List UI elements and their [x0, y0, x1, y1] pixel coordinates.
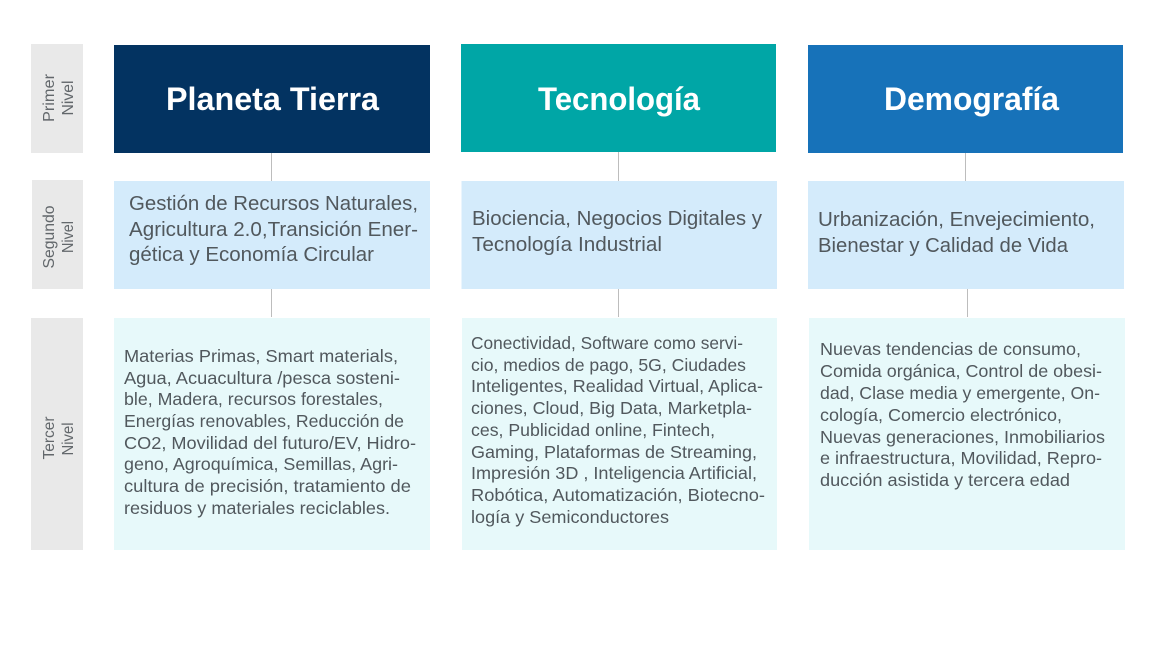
- third level: Demografía: dad, Clase media y emergente, On-: [820, 383, 1100, 403]
- third level: Demografía: Nuevas tendencias de consumo,: [820, 339, 1081, 359]
- third level: Tecnología: Inteligentes, Realidad Virtual, Aplica-: [471, 376, 763, 396]
- header: Tecnología: [461, 44, 776, 152]
- row label: Primer Nivel: Nivel: [60, 80, 77, 116]
- second level: Planeta Tierra: [114, 181, 430, 289]
- row label: Tercer Nivel: Nivel: [60, 422, 77, 456]
- third level: Tecnología: cio, medios de pago, 5G, Ciudades: [471, 355, 746, 375]
- third level: Planeta Tierra: ble, Madera, recursos forestales,: [124, 389, 383, 409]
- row label: Primer Nivel: [31, 44, 83, 153]
- third level: Planeta Tierra: Energías renovables, Reducción de: [124, 411, 404, 431]
- header: Planeta Tierra: [114, 45, 430, 153]
- second level: Tecnología: [462, 181, 777, 289]
- second level: Planeta Tierra: Agricultura 2.0,Transición Ener-: [129, 218, 418, 241]
- second level: Planeta Tierra: gética y Economía Circular: [129, 243, 374, 266]
- third level: Planeta Tierra: Materias Primas, Smart materials,: [124, 346, 398, 366]
- third level: Demografía: ducción asistida y tercera edad: [820, 470, 1070, 490]
- row label: Primer Nivel: Primer: [41, 73, 58, 122]
- third level: Demografía: cología, Comercio electrónico,: [820, 405, 1062, 425]
- second level: Tecnología: Tecnología Industrial: [472, 233, 662, 256]
- third level: Tecnología: Gaming, Plataformas de Streaming,: [471, 442, 757, 462]
- column: Demografía: [808, 45, 1125, 550]
- second level: Demografía: Urbanización, Envejecimiento,: [818, 208, 1095, 231]
- header: Demografía: [808, 45, 1123, 153]
- third level: Tecnología: [462, 318, 777, 550]
- third level: Tecnología: ciones, Cloud, Big Data, Marketpla-: [471, 398, 752, 418]
- third level: Demografía: Comida orgánica, Control de obesi-: [820, 361, 1102, 381]
- third level: Demografía: Nuevas generaciones, Inmobiliarios: [820, 427, 1105, 447]
- third level: Tecnología: Robótica, Automatización, Biotecno-: [471, 485, 765, 505]
- second level: Demografía: Bienestar y Calidad de Vida: [818, 234, 1069, 257]
- header: Planeta Tierra: Planeta Tierra: [166, 81, 379, 117]
- third level: Tecnología: Impresión 3D , Inteligencia Artificial,: [471, 463, 757, 483]
- third level: Planeta Tierra: geno, Agroquímica, Semillas, Agri-: [124, 454, 398, 474]
- third level: Demografía: [809, 318, 1125, 550]
- row label: Tercer Nivel: Tercer: [41, 416, 58, 460]
- third level: Planeta Tierra: Agua, Acuacultura /pesca sosteni-: [124, 368, 400, 388]
- row label: Segundo Nivel: Segundo: [41, 205, 58, 268]
- third level: Demografía: e infraestructura, Movilidad, Repro-: [820, 448, 1102, 468]
- row label: Segundo Nivel: Nivel: [60, 221, 77, 253]
- third level: Tecnología: Conectividad, Software como servi-: [471, 333, 743, 353]
- third level: Planeta Tierra: [114, 318, 430, 550]
- column: Planeta Tierra: [114, 45, 430, 550]
- header: Tecnología: Tecnología: [538, 81, 700, 117]
- second level: Demografía: [808, 181, 1124, 289]
- third level: Tecnología: ces, Publicidad online, Fintech,: [471, 420, 715, 440]
- row label: Tercer Nivel: [31, 318, 83, 550]
- third level: Tecnología: logía y Semiconductores: [471, 507, 669, 527]
- second level: Planeta Tierra: Gestión de Recursos Naturales,: [129, 192, 418, 215]
- header: Demografía: Demografía: [884, 81, 1059, 117]
- third level: Planeta Tierra: residuos y materiales reciclables.: [124, 498, 390, 518]
- third level: Planeta Tierra: cultura de precisión, tratamiento de: [124, 476, 411, 496]
- second level: Tecnología: Biociencia, Negocios Digitales y: [472, 207, 763, 230]
- third level: Planeta Tierra: CO2, Movilidad del futuro/EV, Hidro-: [124, 433, 416, 453]
- row label: Segundo Nivel: [32, 180, 83, 289]
- column: Tecnología: [461, 44, 777, 550]
